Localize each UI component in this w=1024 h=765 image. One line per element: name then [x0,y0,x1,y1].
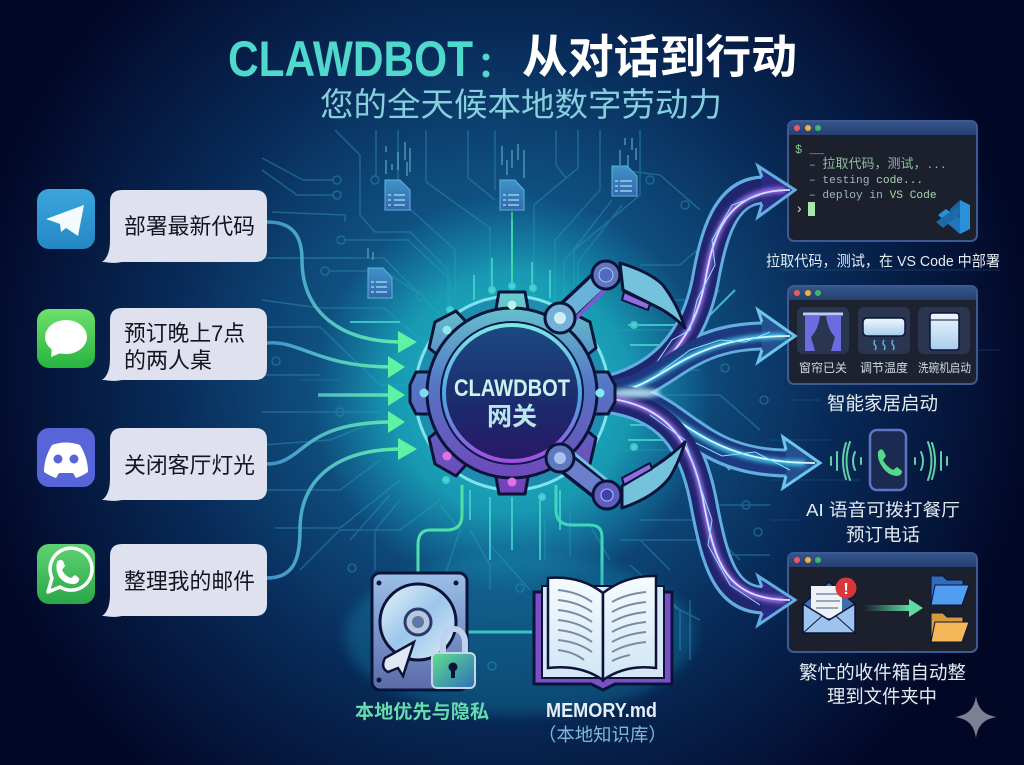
icon: Telegram [37,189,95,249]
output lightning arrows [609,166,820,625]
icon: document 3 [612,166,637,196]
flow: WhatsApp [267,449,402,578]
green data stream [511,212,513,280]
caption: inbox organising [799,662,966,707]
panel: smart home window [788,286,977,384]
message bubble: table booking: 预订晚上7点 [124,321,245,346]
arrow: to terminal [612,166,795,390]
caption: AI voice call [806,500,960,545]
icon: open memory book [534,576,672,690]
caption: inbox organising: 理到文件夹中 [827,686,937,707]
icon: VS Code logo [936,200,970,234]
label: MEMORY.md: （本地知识库） [538,724,667,745]
message bubble: deploy [102,190,267,263]
bright traces around the gateway [350,220,735,560]
panel: inbox window [788,553,977,652]
icon: envelope with alert [803,578,856,633]
robot claw: upper [545,261,685,333]
tile: curtains closed: 窗帘已关 [799,360,847,375]
icon: envelope with alert: ! [843,581,849,598]
gateway gear [410,292,615,494]
message bubble: deploy: 部署最新代码 [124,214,255,239]
caption: AI voice call: AI 语音可拨打餐厅 [806,500,960,520]
arrow: to smart home [612,310,795,392]
terminal text [795,143,947,218]
terminal text: – testing code... [809,175,923,187]
panel: terminal window [788,121,977,241]
gateway label: 网关 [487,403,537,431]
message bubble: emails [102,544,267,617]
icon: yellow folder [931,613,969,642]
title: CLAWDBOT [228,31,473,87]
subtitle: 您的全天候本地数字劳动力 [320,86,722,123]
gateway label [454,375,570,431]
robot claw: lower [546,442,685,509]
icons: file documents [368,166,637,298]
flow: Discord [267,422,392,464]
message bubble: lights off: 关闭客厅灯光 [124,453,255,478]
sound waves [831,442,947,480]
terminal text: › [795,202,803,218]
gear bolts [420,300,604,486]
arrow: inbox to folders [864,599,923,617]
label: MEMORY.md: MEMORY.md [546,700,657,722]
caption: smart home: 智能家居启动 [827,393,938,414]
central glow [312,193,712,593]
flow: centre [318,393,392,397]
storage glow [345,555,695,715]
icon: document 4 [368,268,392,298]
arrow: to phone call [612,396,820,488]
message bubble: lights off [102,428,267,501]
tile: temperature: 调节温度 [860,360,908,375]
circuit board traces [262,130,1000,670]
icon: Discord [37,428,95,487]
title [228,31,797,87]
tile: temperature [858,307,910,375]
data particles above documents [368,138,636,260]
terminal text: – 拉取代码，测试，... [809,157,947,172]
message bubble: emails: 整理我的邮件 [124,569,255,594]
icon: sparkle watermark [955,696,997,738]
label: local first and privacy: 本地优先与隐私 [355,701,489,723]
tile: dishwasher [918,307,971,375]
flow: iMessage [267,343,392,367]
icon: hard drive with lock [372,573,475,690]
gear teeth and body [410,292,615,494]
icon: Messages [37,309,95,368]
inner rim [440,321,584,465]
lightning hub glow [609,388,661,398]
input flows into gateway [267,222,402,578]
icon: padlock [432,629,475,688]
terminal text: – deploy in VS Code [809,190,937,202]
caption: AI voice call: 预订电话 [846,525,920,545]
label: MEMORY.md [538,700,667,745]
caption: code deployment: 拉取代码，测试，在 VS Code 中部署 [766,253,1000,270]
arrow: to inbox [612,399,795,625]
message bubble: table booking: 的两人桌 [124,348,212,373]
icon: document 2 [500,180,524,210]
icon: document 1 [385,180,410,210]
icon: blue folder [931,576,969,605]
terminal text: $ __ [795,143,825,157]
input arrowheads [388,331,417,460]
tile: dishwasher: 洗碗机启动 [918,360,971,375]
caption: inbox organising: 繁忙的收件箱自动整 [799,662,966,683]
outer glow ring [415,296,609,490]
icon: AI voice phone [831,430,947,490]
panel: chat apps and messages [37,189,267,617]
gateway label: CLAWDBOT [454,375,570,402]
flow: Telegram [267,222,402,342]
message bubble: table booking [102,308,267,381]
tile: curtains closed [797,307,849,375]
icon: WhatsApp [37,544,95,604]
connectors: gateway to local storage [418,485,602,632]
title: 从对话到行动 [522,31,797,83]
